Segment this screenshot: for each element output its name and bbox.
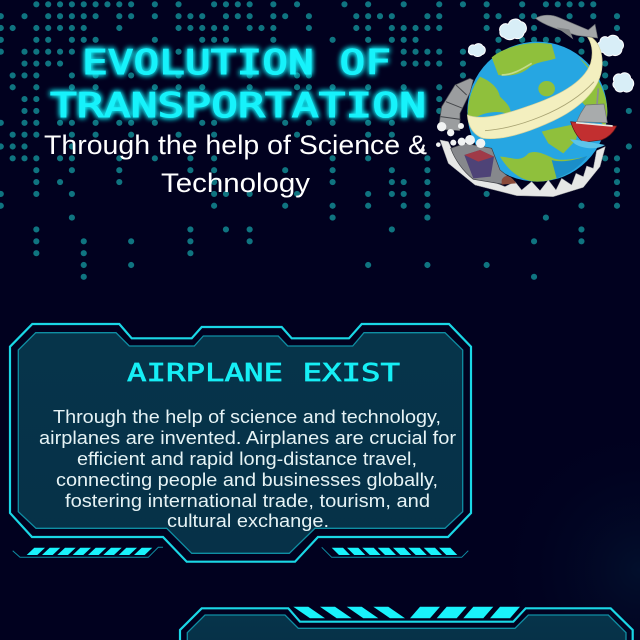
railway arc: [440, 140, 605, 197]
background dot matrix: [1, 4, 629, 277]
subtitle: Technology: [161, 168, 311, 198]
panel body text: fostering international trade, tourism, and: [65, 491, 430, 511]
title: [50, 43, 426, 126]
panel fill and inner outline: [18, 333, 463, 553]
subtitle: [44, 130, 427, 198]
train carriages: [438, 78, 473, 131]
decorative bar left: [13, 547, 163, 557]
icon: globe with plane, ship and train: [421, 15, 634, 197]
smoke: [421, 122, 485, 152]
plane: [536, 15, 598, 39]
ocean: [467, 42, 607, 182]
panel heading: AIRPLANE EXIST: [127, 358, 400, 387]
land: [468, 43, 607, 182]
cream ribbon: [467, 35, 602, 139]
panel body text: airplanes are invented. Airplanes are crucial for: [39, 428, 456, 448]
subtitle: Through the help of Science &: [44, 130, 427, 160]
panel body text: connecting people and businesses globally,: [56, 470, 438, 490]
panel body text: Through the help of science and technology,: [53, 407, 441, 427]
panel: airplane exist: [10, 324, 471, 562]
ship: [570, 88, 617, 148]
panel outer frame: [10, 324, 471, 562]
lower panel decorative stripes: [293, 607, 520, 618]
decorative bar right: [322, 547, 468, 557]
title line 2: TRANSPORTATION: [50, 86, 426, 126]
lower panel fill and inner outline: [187, 615, 626, 640]
train engine: [451, 143, 516, 185]
panel: next section, cropped at bottom: [180, 607, 633, 640]
title line 1: EVOLUTION OF: [82, 43, 391, 83]
panel body text: [39, 407, 456, 531]
clouds: [468, 19, 634, 92]
lower panel outer frame: [180, 608, 633, 640]
panel body text: cultural exchange.: [167, 511, 329, 531]
panel body text: efficient and rapid long-distance travel,: [77, 449, 417, 469]
